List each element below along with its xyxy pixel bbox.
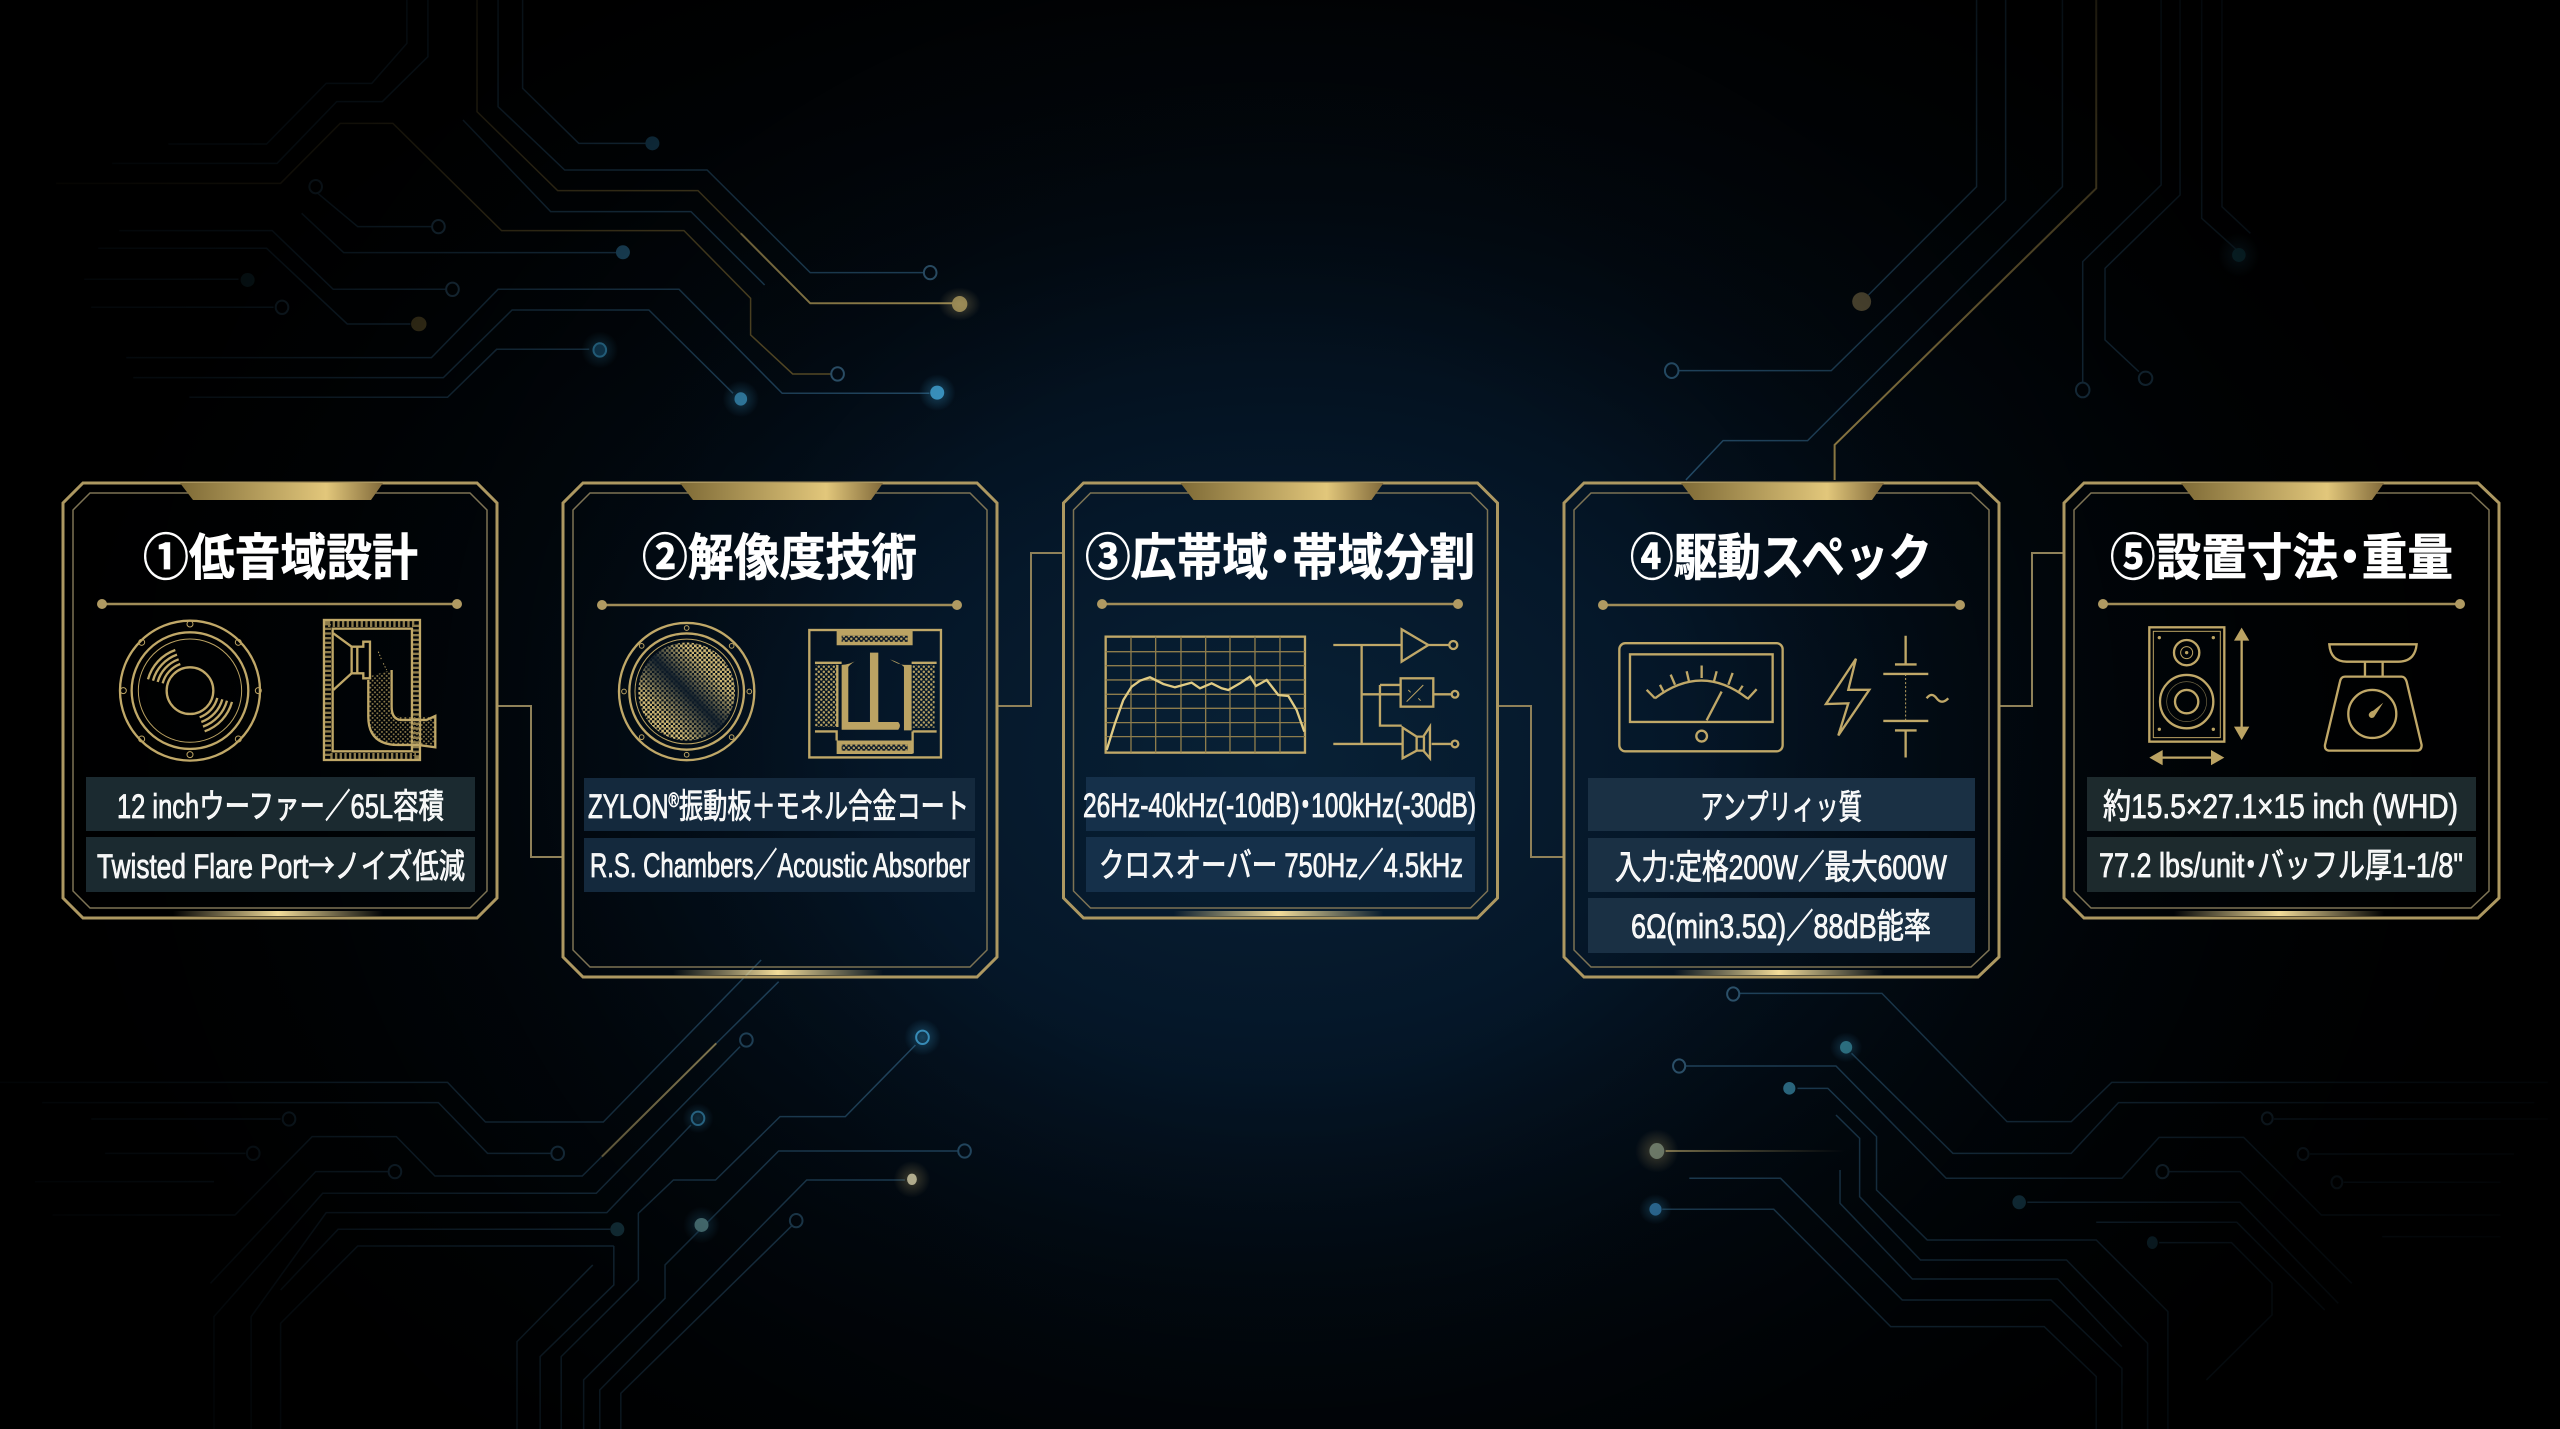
spec row 2: クロスオーバー 750Hz／4.5kHz [1099, 847, 1463, 885]
panel frame [563, 483, 997, 977]
circuit traces: bottom left [0, 960, 971, 1429]
spec row 2: 77.2 lbs/unit・バッフル厚1-1/8" [2099, 847, 2463, 885]
panel 2: resolution technology [563, 483, 997, 977]
heading: ③広帯域・帯域分割 [1085, 530, 1475, 586]
icon: resonance suppression chambers [809, 630, 941, 757]
heading: ①低音域設計 [143, 530, 418, 586]
spec row 2 [1086, 837, 1475, 892]
heading: ⑤設置寸法・重量 [2110, 530, 2453, 586]
spec row 1: ® [669, 790, 679, 812]
connector: panel 2 to panel 3 [997, 553, 1063, 706]
spec row 1 [2087, 777, 2476, 831]
circuit traces: top right [1665, 0, 2259, 480]
panel 3: bandwidth and crossover [1064, 483, 1498, 918]
divider [1598, 600, 1965, 610]
panel frame [1064, 483, 1498, 918]
spec row 1: ZYLON [588, 788, 701, 826]
spec row 1: アンプリィッ質 [1700, 789, 1862, 827]
spec row 1 [1083, 777, 1476, 831]
connector: panel 1 to panel 2 [497, 706, 563, 857]
panel 5: dimensions and weight [2064, 483, 2499, 918]
circuit traces: top left [56, 0, 981, 417]
heading: ②解像度技術 [642, 530, 917, 586]
divider [597, 600, 962, 610]
divider [97, 599, 462, 609]
icon: speaker with dimensions [2149, 627, 2249, 765]
icon: weighing scale [2325, 644, 2422, 751]
icon: power and capacitor [1826, 636, 1948, 757]
spec row 1 [1588, 778, 1975, 831]
icon: crossover circuit [1333, 629, 1458, 758]
spec row 3: 6Ω(min3.5Ω)／88dB能率 [1631, 908, 1931, 946]
panel frame [63, 483, 497, 918]
spec row 3 [1588, 898, 1975, 953]
heading: ④駆動スペック [1630, 530, 1932, 586]
panel 4: drive specifications [1564, 483, 1999, 977]
panel 1: low frequency design [63, 483, 497, 918]
connector: panel 3 to panel 4 [1498, 706, 1564, 857]
spec row 1: 12 inchウーファー／65L容積 [117, 788, 444, 826]
spec row 2: R.S. Chambers／Acoustic Absorber [590, 847, 970, 885]
spec row 2: Twisted Flare Port→ノイズ低減 [97, 839, 465, 888]
spec row 2: 入力:定格200W／最大600W [1615, 849, 1947, 887]
divider [2098, 599, 2465, 609]
connector: panel 4 to panel 5 [2000, 553, 2064, 706]
spec row 1 [86, 777, 475, 831]
icon: zylon diaphragm [619, 623, 754, 760]
circuit traces: bottom right [1635, 987, 2548, 1429]
panel frame [1564, 483, 1999, 977]
icon: amp meter [1619, 643, 1783, 751]
spec row 2 [2087, 837, 2476, 892]
divider [1097, 599, 1463, 609]
spec row 1: 約15.5×27.1×15 inch (WHD) [2103, 788, 2458, 826]
spec row 2 [584, 838, 975, 892]
icon: woofer [120, 621, 261, 761]
spec row 1 [584, 778, 975, 831]
spec row 1: 26Hz-40kHz(-10dB)・100kHz(-30dB) [1083, 787, 1476, 825]
icon: twisted flare port cabinet [324, 620, 436, 760]
spec row 2 [1588, 838, 1975, 892]
panel frame [2064, 483, 2499, 918]
spec row 1: 振動板＋モネル合金コート [679, 788, 969, 826]
chart: frequency response [1106, 637, 1305, 753]
